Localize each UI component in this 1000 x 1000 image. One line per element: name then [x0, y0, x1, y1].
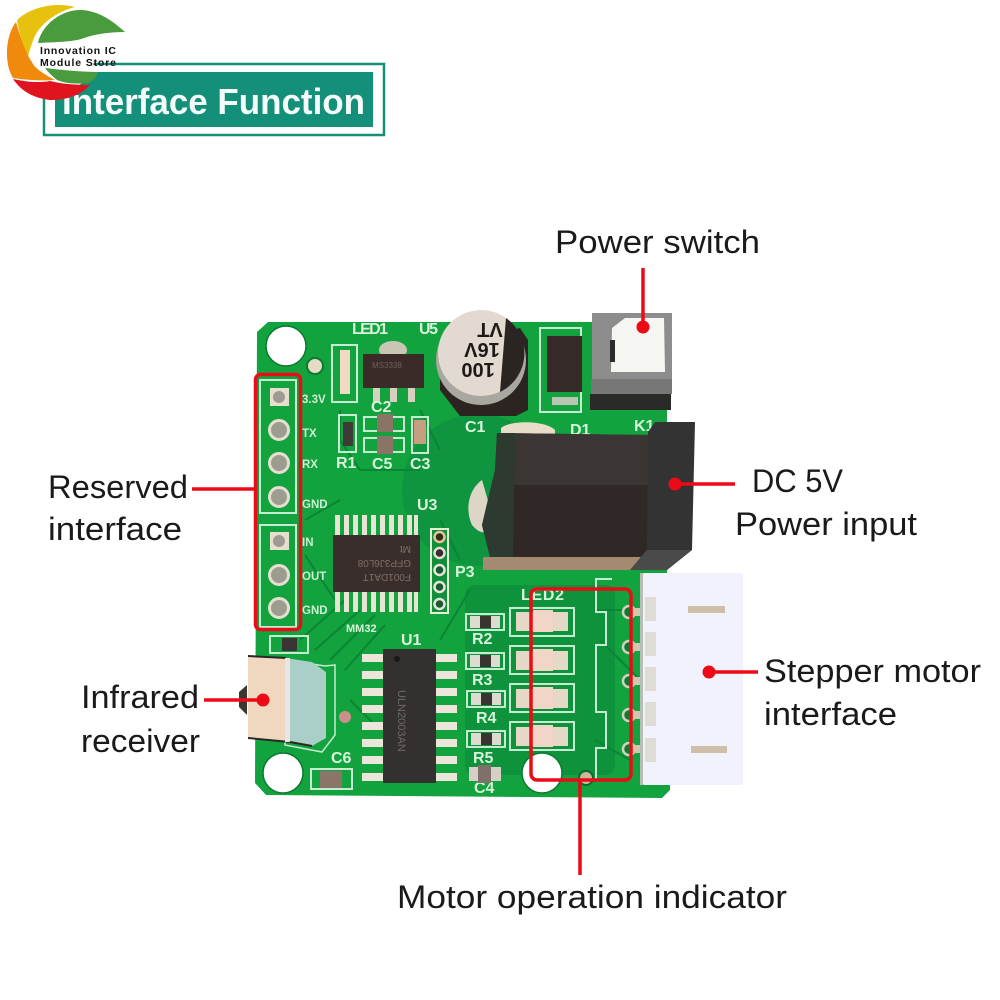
callout: reserved interface: Reserved	[48, 469, 188, 505]
board outline	[255, 322, 670, 798]
traces and shaded copper	[300, 410, 640, 775]
small passives: D1	[570, 422, 591, 439]
small passives: R3	[472, 672, 493, 689]
logo	[7, 5, 125, 100]
callout: stepper motor interface: interface	[764, 696, 897, 732]
callout: power switch: Power switch	[555, 224, 760, 260]
P3 header	[431, 529, 448, 613]
small passives: C6	[331, 750, 352, 767]
header silkscreen	[302, 394, 328, 617]
small passives: LED2	[521, 587, 564, 604]
header silkscreen: IN	[302, 537, 314, 549]
callout: stepper motor interface: Stepper motor	[764, 653, 981, 689]
small passives: C4	[474, 780, 495, 797]
callout: power switch	[555, 224, 760, 334]
small passives	[331, 399, 655, 797]
small passives: C5	[372, 456, 393, 473]
diode D1	[540, 328, 582, 412]
U1 chip	[362, 649, 457, 783]
small passives: U1	[401, 632, 422, 649]
power LED and regulator: U5	[419, 321, 438, 338]
logo text	[40, 45, 116, 69]
header silkscreen: GND	[302, 605, 328, 617]
small passives: P3	[455, 564, 475, 581]
power LED and regulator: LED1	[352, 321, 388, 338]
small passives: K1	[634, 418, 655, 435]
power switch	[590, 313, 672, 410]
motor connector pins	[623, 606, 644, 755]
infrared receiver	[239, 656, 351, 752]
callout: reserved interface	[48, 374, 300, 630]
logo text: Module Store	[40, 57, 116, 69]
callout: stepper motor interface	[702, 653, 981, 732]
white motor connector	[640, 573, 743, 785]
callout: DC 5V power input	[668, 463, 917, 542]
callout: DC 5V power input: Power input	[735, 506, 917, 542]
small passives: R4	[476, 710, 497, 727]
small passives: R2	[472, 631, 493, 648]
small passives: R5	[473, 750, 494, 767]
header pads	[260, 380, 296, 627]
power LED and regulator	[332, 321, 438, 402]
U3 chip: GFP3J6L08	[357, 557, 411, 568]
capacitor C1: 100	[461, 358, 495, 380]
U3 chip	[333, 515, 420, 612]
header silkscreen: TX	[302, 428, 317, 440]
U3 chip: Mt	[400, 543, 411, 554]
callout: motor operation indicator: Motor operation indicator	[397, 879, 787, 915]
callout: reserved interface: interface	[48, 511, 182, 547]
U1 chip: ULN2003AN	[395, 690, 407, 752]
callout: infrared receiver: Infrared	[81, 679, 199, 715]
small passives: U3	[417, 497, 438, 514]
C6 and small resistor	[270, 636, 352, 789]
logo text: Innovation IC	[40, 45, 116, 57]
callout: infrared receiver	[81, 679, 270, 759]
callout: motor operation indicator	[397, 589, 787, 915]
motor LEDs and resistors	[466, 608, 574, 783]
small passives: C2	[371, 399, 392, 416]
header silkscreen: GND	[302, 499, 328, 511]
callout: DC 5V power input: DC 5V	[752, 463, 844, 499]
capacitor C1: 16V	[464, 338, 500, 360]
small passives: MM32	[346, 623, 377, 635]
U3 chip: F001DA1T	[363, 571, 411, 582]
capacitor C1	[436, 310, 528, 416]
capacitor C1: VT	[477, 318, 503, 340]
DC jack	[468, 422, 695, 570]
header silkscreen: OUT	[302, 571, 326, 583]
header silkscreen: 3.3V	[302, 394, 326, 406]
callout: infrared receiver: receiver	[81, 723, 200, 759]
small passives: C3	[410, 456, 431, 473]
small passives: R1	[336, 455, 357, 472]
title banner	[44, 64, 384, 135]
connector silkscreen outline	[596, 579, 612, 780]
title banner: Interface Function	[62, 81, 365, 122]
small passives: C1	[465, 419, 486, 436]
mounting holes	[263, 326, 593, 793]
header silkscreen: RX	[302, 459, 318, 471]
circuit board	[239, 310, 743, 798]
power LED and regulator: MS3338	[372, 361, 402, 370]
